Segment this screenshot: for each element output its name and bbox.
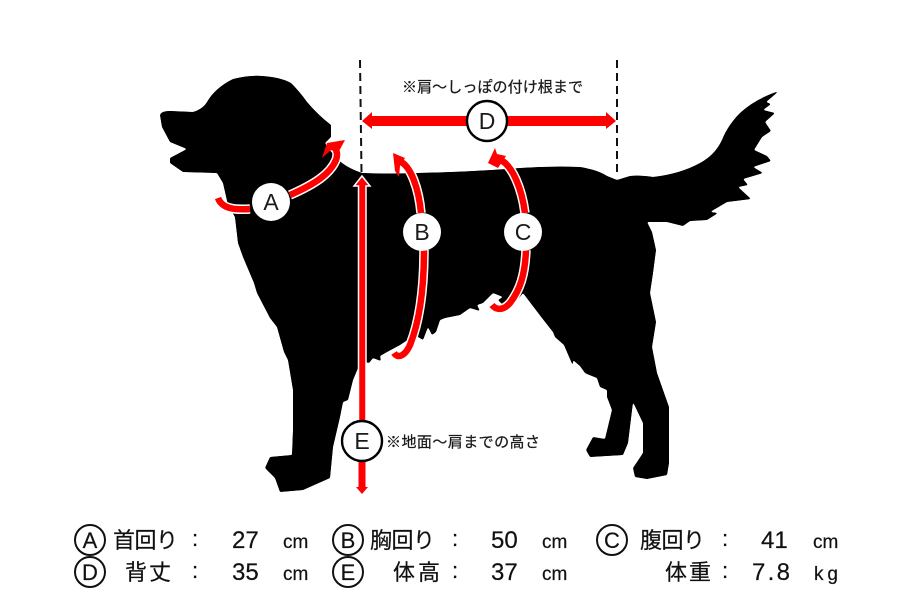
arrow and label A: neck — [218, 140, 345, 221]
row: chest 50 cm: cm — [542, 532, 567, 553]
row: height 37 cm: cm — [542, 564, 567, 585]
row: weight 7.8 kg: kg — [814, 564, 838, 585]
row: neck 27 cm: : — [192, 526, 198, 551]
row: belly 41 cm: 41 — [761, 527, 788, 554]
row: neck 27 cm — [75, 525, 308, 555]
row: neck 27 cm: 首回り — [113, 528, 178, 553]
row: weight 7.8 kg: : — [722, 558, 728, 583]
row: back length 35 cm: 背丈 — [125, 560, 171, 585]
row: back length 35 cm: cm — [283, 564, 308, 585]
arrow and label D: back length — [362, 101, 616, 141]
row: height 37 cm: E — [341, 560, 355, 585]
dog silhouette — [160, 76, 779, 492]
row: back length 35 cm: 35 — [232, 559, 259, 586]
row: chest 50 cm: 50 — [491, 527, 518, 554]
arrow and label B: chest: B — [414, 219, 430, 245]
row: neck 27 cm: A — [83, 528, 98, 553]
arrow and label A: neck: A — [263, 189, 279, 215]
row: height 37 cm — [333, 557, 567, 587]
row: chest 50 cm: B — [341, 528, 355, 553]
row: chest 50 cm — [333, 525, 567, 555]
row: weight 7.8 kg: 7.8 — [752, 559, 790, 586]
row: chest 50 cm: : — [452, 526, 458, 551]
measurement table — [75, 525, 838, 587]
row: neck 27 cm: cm — [283, 532, 308, 553]
row: height 37 cm: 37 — [491, 559, 518, 586]
dashed guide lines — [360, 60, 617, 176]
arrow and label E: height: E — [354, 428, 370, 454]
row: chest 50 cm: 胸回り — [370, 528, 435, 553]
arrow and label E: height — [342, 176, 382, 494]
arrow and label C: belly: C — [515, 219, 531, 245]
row: weight 7.8 kg — [665, 558, 838, 586]
row: back length 35 cm — [75, 557, 308, 587]
row: belly 41 cm: C — [604, 528, 620, 553]
arrow and label C: belly — [488, 148, 542, 309]
arrow and label B: chest — [393, 153, 441, 356]
row: belly 41 cm: 腹回り — [640, 528, 705, 553]
row: back length 35 cm: : — [192, 558, 198, 583]
note: shoulder to tail base: ※肩～しっぽの付け根まで — [402, 79, 583, 96]
row: belly 41 cm — [597, 525, 838, 555]
row: weight 7.8 kg: 体重 — [665, 560, 711, 585]
row: belly 41 cm: : — [722, 526, 728, 551]
row: back length 35 cm: D — [82, 560, 98, 585]
note: ground to shoulder height: ※地面～肩までの高さ — [386, 434, 540, 451]
row: height 37 cm: : — [452, 558, 458, 583]
row: neck 27 cm: 27 — [232, 527, 259, 554]
row: height 37 cm: 体高 — [393, 560, 440, 585]
arrow and label D: back length: D — [479, 108, 495, 134]
row: belly 41 cm: cm — [813, 532, 838, 553]
